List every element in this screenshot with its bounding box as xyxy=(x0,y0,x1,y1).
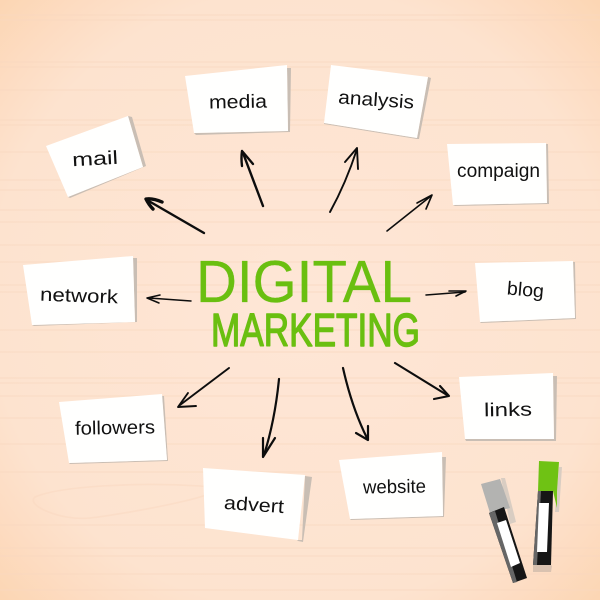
card: blog xyxy=(475,261,576,323)
card: mail xyxy=(46,116,146,198)
card: links: links xyxy=(484,400,532,421)
card: followers: followers xyxy=(75,417,155,440)
card: followers xyxy=(59,394,168,464)
card: network xyxy=(23,256,137,326)
arrow to website xyxy=(343,368,368,440)
title line: digital: DIGITAL xyxy=(196,249,412,315)
arrow to network xyxy=(147,295,191,303)
card: network: network xyxy=(40,285,119,308)
arrow to compaign xyxy=(387,195,432,231)
card: advert xyxy=(203,468,312,542)
icon: grey marker xyxy=(481,478,527,583)
card: media xyxy=(185,65,291,135)
arrow to advert xyxy=(263,379,279,457)
card: links xyxy=(459,373,557,441)
card: mail: mail xyxy=(72,148,119,171)
arrow to media xyxy=(242,151,263,206)
title xyxy=(196,249,420,356)
card: analysis xyxy=(324,65,431,139)
title line: marketing: MARKETING xyxy=(211,304,420,356)
card: website xyxy=(339,452,446,520)
card: analysis: analysis xyxy=(337,87,415,114)
arrow to analysis xyxy=(330,148,358,212)
card: compaign xyxy=(447,143,549,206)
card: media: media xyxy=(209,91,268,114)
card: advert: advert xyxy=(223,493,285,518)
arrow to blog xyxy=(426,291,466,296)
arrow to mail xyxy=(146,199,204,233)
icon: green marker xyxy=(533,461,562,572)
arrow to links xyxy=(395,363,449,399)
arrow to followers xyxy=(178,368,229,407)
card: compaign: compaign xyxy=(457,161,540,182)
card: blog: blog xyxy=(506,278,545,303)
card: website: website xyxy=(362,476,426,499)
